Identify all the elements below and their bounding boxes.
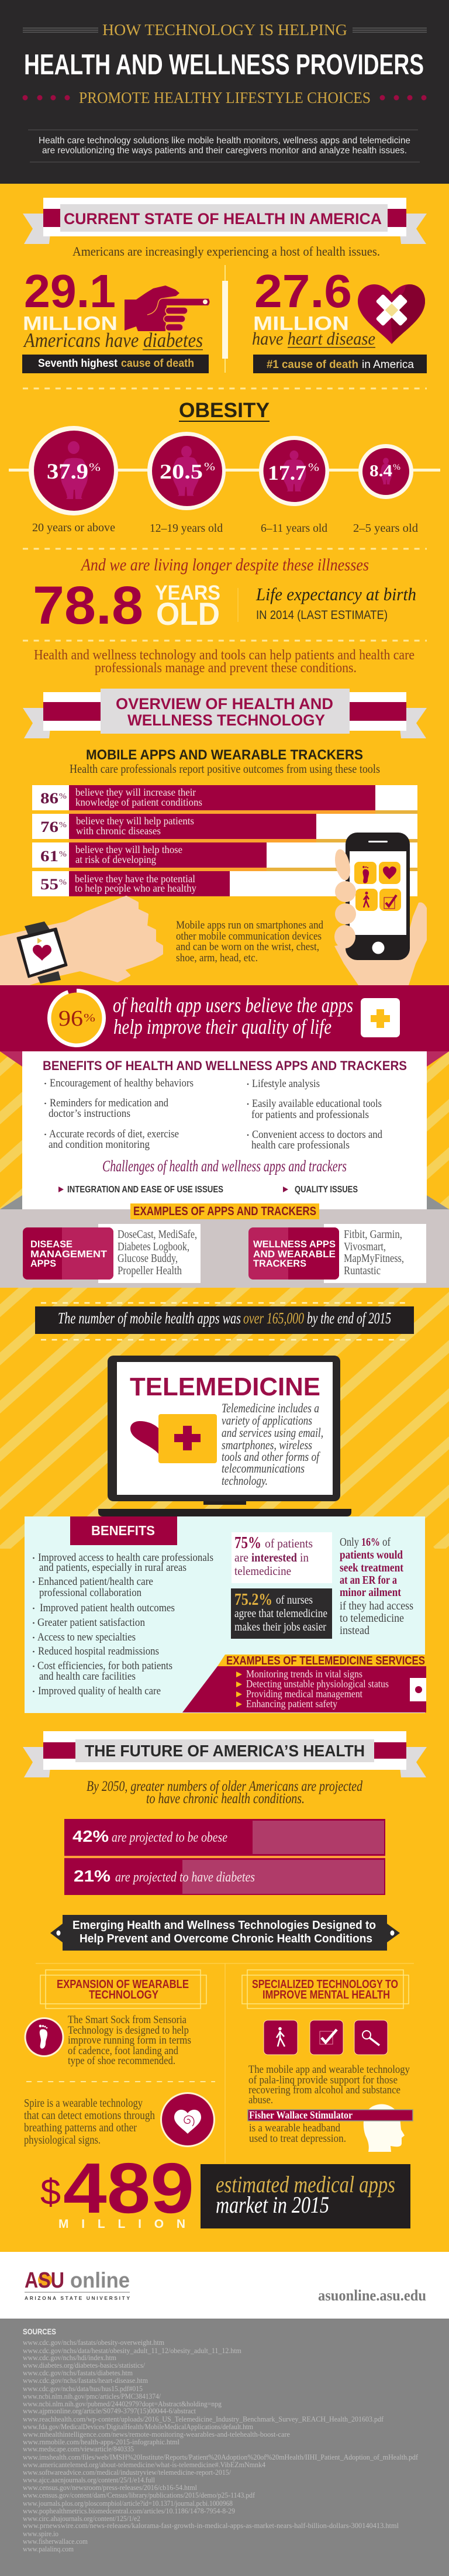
caption bar: in America bbox=[362, 359, 414, 371]
benefits list left bbox=[44, 1077, 194, 1151]
box heading: SPECIALIZED TECHNOLOGY TO bbox=[252, 1978, 398, 1991]
bar: 76%: 76 bbox=[40, 818, 58, 835]
subheading: positive outcomes: Health care professionals report positive outcomes from using these tools bbox=[70, 762, 380, 776]
text: by 2050 bbox=[87, 1779, 362, 1807]
benefits list right: Convenient access to doctors and bbox=[252, 1129, 382, 1141]
source list: www.pophealthmetrics.biomedcentral.com/articles/10.1186/1478-7954-8-29 bbox=[23, 2506, 235, 2515]
stat: heart disease: MILLION bbox=[253, 312, 349, 334]
bar: 21% diabetes: are projected to have diabetes bbox=[115, 1870, 255, 1885]
benefits list: and patients, especially in rural areas bbox=[39, 1562, 186, 1574]
benefits list right: for patients and professionals bbox=[251, 1109, 369, 1121]
text: mobile apps description: Mobile apps run on smartphones and bbox=[176, 919, 323, 931]
text: smart sock bbox=[68, 2014, 191, 2067]
challenge: integration: INTEGRATION AND EASE OF USE ISSUES bbox=[67, 1185, 223, 1195]
ribbon heading: future of health bbox=[23, 1731, 427, 1777]
ribbon heading: overview: WELLNESS TECHNOLOGY bbox=[127, 711, 325, 729]
intro text bbox=[39, 136, 410, 156]
app icon: foot bbox=[362, 866, 369, 883]
stat: only 16%: minor ailment bbox=[340, 1586, 401, 1599]
stat: life expectancy: Life expectancy at birth bbox=[255, 584, 416, 604]
fingers bbox=[333, 848, 356, 948]
phone bbox=[333, 833, 410, 960]
logo: ASU online: online bbox=[70, 2268, 130, 2292]
stat: diabetes: MILLION bbox=[23, 312, 118, 334]
panel: examples of apps and trackers bbox=[0, 1203, 449, 1288]
benefits list left: doctor’s instructions bbox=[49, 1108, 130, 1120]
band: 96% of users: help improve their quality of life bbox=[113, 1015, 331, 1038]
circle: 6-11 years old bbox=[259, 436, 329, 506]
text: pala-linq: of pala-linq provide support for those bbox=[248, 2074, 398, 2086]
caption bar bbox=[253, 355, 427, 373]
bar: 86%: knowledge of patient conditions bbox=[75, 796, 202, 808]
stat: $489 million market: MILLION bbox=[58, 2217, 185, 2231]
benefits tab: BENEFITS bbox=[91, 1523, 155, 1538]
card: wellness apps and trackers: WELLNESS APPS bbox=[253, 1239, 336, 1250]
stat: heart disease: have heart disease bbox=[252, 328, 375, 349]
stat: life expectancy bbox=[33, 576, 416, 635]
label: fisher wallace stimulator: Fisher Wallace Stimulator bbox=[249, 2109, 353, 2121]
donut: 96%: % bbox=[84, 1012, 95, 1024]
bar: 61%: % bbox=[59, 850, 67, 859]
stat: 75.2% of nurses bbox=[231, 1588, 332, 1639]
text: pala-linq: The mobile app and wearable technology bbox=[248, 2063, 410, 2076]
benefits list: and health care facilities bbox=[39, 1670, 136, 1683]
bar: 76% bbox=[40, 815, 194, 837]
bar: 55%: to help people who are healthy bbox=[75, 882, 196, 894]
source list: www.ajpmonline.org/article/S0749-3797(15)00044-6/abstract bbox=[23, 2406, 196, 2415]
stat: diabetes bbox=[22, 265, 209, 373]
bar: 21% diabetes bbox=[64, 1858, 385, 1895]
ribbon heading: current state of health bbox=[23, 198, 427, 244]
source list: www.medscape.com/viewarticle/840335 bbox=[23, 2444, 134, 2453]
card: wellness apps and trackers: TRACKERS bbox=[253, 1258, 306, 1269]
source list: www.prnewswire.com/news-releases/kalorama-fast-growth-in-medical-apps-as-market-nears-half-billion-dollars-300140413.html bbox=[23, 2521, 399, 2530]
benefits list left: Encouragement of healthy behaviors bbox=[50, 1077, 194, 1089]
source list: www.rnmobile.com/health-apps-2015-infographic.html bbox=[23, 2437, 179, 2446]
description: technology. bbox=[222, 1473, 268, 1488]
text: pala-linq: abuse. bbox=[248, 2094, 273, 2106]
obesity chart bbox=[9, 426, 440, 535]
bar chart: outcomes bbox=[32, 785, 417, 896]
panel: examples of telemedicine services: Providing medical management bbox=[246, 1688, 362, 1700]
text: pala-linq: recovering from alcohol and substance bbox=[248, 2084, 400, 2096]
sources panel bbox=[0, 2319, 449, 2576]
text: headband: is a wearable headband bbox=[249, 2122, 340, 2134]
bar: 55%: 55 bbox=[40, 876, 58, 893]
text: smart sock: Technology is designed to help bbox=[68, 2024, 189, 2037]
stat: $489 million market bbox=[40, 2148, 410, 2231]
source list: www.census.gov/content/dam/Census/library/publications/2015/demo/p25-1143.pdf bbox=[23, 2491, 255, 2499]
card: wellness apps and trackers: Vivosmart, bbox=[344, 1240, 386, 1253]
source list: www.softwareadvice.com/medical/industryview/telemedicine-report-2015/ bbox=[23, 2468, 231, 2477]
source list: www.spire.io bbox=[23, 2529, 58, 2538]
card: disease management apps: Propeller Health bbox=[118, 1264, 182, 1277]
icon: foot circle bbox=[25, 2017, 64, 2057]
source list: www.ajcc.aacnjournals.org/content/25/1/e14.full bbox=[23, 2475, 155, 2484]
source list: www.cdc.gov/nchs/data/hus/hus15.pdf#015 bbox=[23, 2384, 143, 2393]
text: by 2050: By 2050, greater numbers of older Americans are projected bbox=[87, 1779, 362, 1794]
card: disease management apps: DISEASE bbox=[30, 1239, 72, 1250]
bar: 76%: believe they will help patients bbox=[76, 815, 194, 827]
circle: 12-19 years old: 20.5 bbox=[160, 460, 203, 483]
benefits list: Cost efficiencies, for both patients bbox=[37, 1660, 172, 1672]
stat: only 16% bbox=[340, 1536, 413, 1637]
stat: life expectancy: IN 2014 (LAST ESTIMATE) bbox=[256, 608, 388, 622]
benefits list: Enhanced patient/health care bbox=[38, 1576, 153, 1588]
logo: ASU online: ARIZONA STATE UNIVERSITY bbox=[25, 2295, 130, 2301]
caption bar: Seventh highest bbox=[38, 357, 118, 370]
bar: 55%: believe they have the potential bbox=[75, 873, 195, 885]
source list: www.cdc.gov/nchs/fastats/diabetes.htm bbox=[23, 2368, 133, 2377]
icon: walker bbox=[264, 2020, 298, 2055]
circle: 6-11 years old: 17.7 bbox=[268, 461, 306, 484]
stat: 75% of patients: of patients bbox=[265, 1536, 313, 1550]
text: spire: that can detect emotions through bbox=[24, 2109, 155, 2122]
stat: 75.2% of nurses: 75.2% bbox=[234, 1591, 272, 1609]
age labels: 6–11 years old bbox=[261, 522, 327, 535]
icon: checkmark bbox=[310, 2020, 343, 2055]
card: wellness apps and trackers bbox=[248, 1224, 426, 1283]
icon: hand holding phone bbox=[333, 833, 427, 985]
bar: 61%: believe they will help those bbox=[75, 844, 182, 855]
heading: TELEMEDICINE bbox=[130, 1373, 320, 1401]
bar: 55%: % bbox=[59, 878, 67, 887]
challenges heading: Challenges of health and wellness apps and trackers bbox=[102, 1157, 347, 1175]
panel: benefits of apps and trackers bbox=[0, 1051, 449, 1209]
intro text: are revolutionizing the ways patients and their caregivers monitor and analyze health issues. bbox=[42, 146, 407, 156]
benefits list right: health care professionals bbox=[251, 1139, 350, 1151]
icon: medical plus card bbox=[361, 998, 400, 1037]
card: disease management apps: APPS bbox=[30, 1258, 56, 1269]
stat: diabetes: 29.1 bbox=[24, 265, 116, 317]
text: spire bbox=[24, 2097, 155, 2147]
stat: 75% of patients: 75% bbox=[234, 1534, 261, 1552]
heading: mobile apps: MOBILE APPS AND WEARABLE TRACKERS bbox=[86, 747, 363, 763]
bar: 76%: with chronic diseases bbox=[76, 825, 161, 837]
app icon: checkmark bbox=[384, 895, 396, 909]
source list: www.diabetes.org/diabetes-basics/statistics/ bbox=[23, 2361, 145, 2369]
source list: www.americantelemed.org/about-telemedicine/what-is-telemedicine#.VibEZmNmnk4 bbox=[23, 2460, 265, 2469]
panel: examples of telemedicine services: Enhancing patient safety bbox=[246, 1698, 337, 1710]
card: disease management apps: DoseCast, MediSafe, bbox=[118, 1228, 197, 1241]
callout box: estimated medical apps bbox=[216, 2171, 395, 2197]
description: telecommunications bbox=[222, 1461, 305, 1476]
banner: emerging technologies: Help Prevent and Overcome Chronic Health Conditions bbox=[80, 1932, 372, 1945]
stat: $489 million market: $ bbox=[40, 2172, 61, 2213]
benefits list left: Accurate records of diet, exercise bbox=[49, 1128, 179, 1140]
text: smart sock: The Smart Sock from Sensoria bbox=[68, 2014, 186, 2026]
card: disease management apps bbox=[23, 1224, 201, 1283]
benefits list: professional collaboration bbox=[39, 1587, 141, 1599]
stat: only 16%: 16% bbox=[361, 1536, 380, 1549]
source list: www.circ.ahajournals.org/content/125/1/e2 bbox=[23, 2514, 140, 2523]
text: pala-linq bbox=[248, 2063, 410, 2106]
source list bbox=[23, 2338, 419, 2553]
subheading: Americans are increasingly experiencing a host of health issues. bbox=[72, 244, 380, 259]
callout box bbox=[201, 2164, 410, 2228]
box heading: IMPROVE MENTAL HEALTH bbox=[263, 1989, 390, 2001]
icon: heart and medical card bbox=[130, 1414, 217, 1463]
circle: 20 years or above: 37.9 bbox=[47, 460, 88, 484]
stat: 75% of patients: in bbox=[300, 1550, 309, 1564]
sources panel: SOURCES bbox=[23, 2327, 56, 2336]
card: disease management apps: Diabetes Logbook, bbox=[118, 1240, 189, 1253]
source list: www.fda.gov/MedicalDevices/DigitalHealth/MobileMedicalApplications/default.htm bbox=[23, 2422, 253, 2431]
stat: heart disease: 27.6 bbox=[254, 265, 352, 317]
text: technology can help bbox=[34, 648, 415, 676]
caption bar: cause of death bbox=[121, 357, 194, 370]
benefits list: Improved quality of health care bbox=[38, 1685, 161, 1697]
age labels: 12–19 years old bbox=[150, 522, 223, 535]
card: wellness apps and trackers: Runtastic bbox=[344, 1264, 381, 1277]
text: mobile apps description: shoe, arm, head, etc. bbox=[176, 952, 258, 964]
callout: number of apps: over 165,000 bbox=[243, 1309, 304, 1327]
stat: only 16%: seek treatment bbox=[340, 1562, 403, 1574]
heading: BENEFITS OF HEALTH AND WELLNESS APPS AND TRACKERS bbox=[43, 1058, 407, 1073]
stat: heart disease bbox=[252, 265, 427, 373]
bar: 61%: 61 bbox=[40, 848, 58, 865]
tab heading: EXAMPLES OF APPS AND TRACKERS bbox=[133, 1205, 316, 1218]
circle: 2-5 years old: % bbox=[393, 463, 400, 472]
source list: www.mhealthintelligence.com/news/remote-monitoring-wearables-and-telehealth-boost-care bbox=[23, 2430, 290, 2439]
benefits list left: Reminders for medication and bbox=[50, 1097, 168, 1109]
benefits list right bbox=[247, 1078, 382, 1151]
benefits list left: and condition monitoring bbox=[49, 1139, 150, 1151]
bar: 86%: believe they will increase their bbox=[75, 786, 196, 798]
bar: 76%: % bbox=[59, 821, 67, 830]
icon: magnifier bbox=[354, 2020, 388, 2055]
heading line 1: HOW TECHNOLOGY IS HELPING bbox=[102, 21, 347, 39]
intro text: Health care technology solutions like mobile health monitors, wellness apps and telemedicine bbox=[39, 136, 410, 146]
circle: 12-19 years old bbox=[147, 432, 226, 510]
ribbon heading: future of health: THE FUTURE OF AMERICA’S HEALTH bbox=[85, 1742, 365, 1760]
stat: 75% of patients: are bbox=[234, 1550, 248, 1564]
card: disease management apps: Glucose Buddy, bbox=[118, 1252, 178, 1265]
ribbon heading: overview: OVERVIEW OF HEALTH AND bbox=[116, 695, 333, 713]
age labels: 2–5 years old bbox=[353, 522, 418, 535]
stat: only 16%: patients would bbox=[340, 1549, 403, 1562]
card: wellness apps and trackers: Fitbit, Garmin, bbox=[344, 1228, 402, 1241]
stat: only 16%: if they had access bbox=[340, 1600, 413, 1612]
source list: www.cdc.gov/nchs/fastats/obesity-overweight.htm bbox=[23, 2338, 164, 2347]
circle: 2-5 years old: 8.4 bbox=[369, 462, 392, 480]
panel: examples of telemedicine services: Detecting unstable physiological status bbox=[246, 1678, 389, 1690]
callout: number of apps bbox=[35, 1306, 414, 1334]
circle: 2-5 years old bbox=[358, 444, 413, 499]
text: smart sock: of cadence, foot landing and bbox=[68, 2045, 178, 2057]
bar: 42% obese: are projected to be obese bbox=[112, 1830, 227, 1845]
source list: www.cdc.gov/nchs/hdi/index.htm bbox=[23, 2353, 116, 2362]
donut: 96% bbox=[47, 989, 106, 1047]
stat: 75% of patients: telemedicine bbox=[234, 1564, 291, 1578]
benefits list: Greater patient satisfaction bbox=[37, 1617, 145, 1629]
banner: emerging technologies: Emerging Health and Wellness Technologies Designed to bbox=[72, 1919, 376, 1932]
donut: 96%: 96 bbox=[58, 1006, 83, 1031]
description: variety of applications bbox=[222, 1413, 312, 1428]
description: tools and other forms of bbox=[222, 1449, 320, 1464]
benefits list: Access to new specialties bbox=[37, 1631, 136, 1643]
benefits list bbox=[33, 1552, 213, 1697]
bar: 61% bbox=[40, 844, 182, 865]
source list: www.ncbi.nlm.nih.gov/pubmed/24402979?dopt=Abstract&holding=npg bbox=[23, 2399, 222, 2408]
source list: www.imshealth.com/files/web/IMSH%20Institute/Reports/Patient%20Adoption%20of%20mHealth/IIHI_Patient_Adoption_of_mHealth.pdf bbox=[23, 2453, 419, 2461]
text: mobile apps description: other mobile communication devices bbox=[176, 930, 322, 943]
source list: www.fisherwallace.com bbox=[23, 2537, 88, 2546]
description bbox=[222, 1401, 323, 1488]
text: technology can help: professionals manage and prevent these conditions. bbox=[95, 661, 357, 676]
source list: www.reachhealth.com/wp-content/uploads/2016_US_Telemedicine_Industry_Benchmark_Survey_REACH_Health_201603.pdf bbox=[23, 2415, 384, 2423]
callout: number of apps: by the end of 2015 bbox=[307, 1309, 391, 1327]
banner: emerging technologies bbox=[50, 1915, 400, 1951]
card: disease management apps: MANAGEMENT bbox=[30, 1249, 108, 1260]
band: 96% of users bbox=[0, 985, 449, 1051]
card: wellness apps and trackers: MapMyFitness, bbox=[344, 1252, 404, 1265]
text: spire: breathing patterns and other bbox=[24, 2121, 137, 2134]
stat: only 16%: at an ER for a bbox=[340, 1574, 397, 1587]
app icon: heart bbox=[383, 866, 396, 879]
stat: life expectancy: OLD bbox=[156, 596, 220, 632]
column: expansion of wearable technology bbox=[24, 1970, 215, 2147]
benefits tab bbox=[70, 1516, 177, 1545]
ribbon heading: current state of health: CURRENT STATE OF HEALTH IN AMERICA bbox=[64, 210, 382, 228]
bar chart: projections bbox=[64, 1819, 385, 1895]
panel: examples of telemedicine services bbox=[182, 1655, 426, 1712]
source list: www.ncbi.nlm.nih.gov/pmc/articles/PMC3841374/ bbox=[23, 2392, 161, 2400]
stat: diabetes: Americans have diabetes bbox=[23, 329, 203, 352]
stat: only 16%: instead bbox=[340, 1624, 369, 1637]
benefits list: Improved access to health care professionals bbox=[38, 1552, 213, 1564]
header panel bbox=[0, 0, 449, 184]
age labels: 20 years or above bbox=[32, 521, 115, 534]
source list: www.cdc.gov/nchs/data/hestat/obesity_adult_11_12/obesity_adult_11_12.htm bbox=[23, 2346, 241, 2355]
callout: number of apps: The number of mobile health apps was bbox=[58, 1309, 241, 1327]
bar: 42% obese bbox=[64, 1819, 385, 1856]
benefits list right: Lifestyle analysis bbox=[252, 1078, 320, 1090]
description: and services using email, bbox=[222, 1425, 323, 1440]
bar: 86%: 86 bbox=[40, 790, 58, 807]
circle: 12-19 years old: % bbox=[204, 460, 215, 473]
bar: 42% obese: 42% bbox=[72, 1827, 109, 1845]
age labels bbox=[32, 521, 418, 535]
icon: wrist with smartwatch bbox=[0, 897, 162, 985]
text: headband: used to treat depression. bbox=[249, 2133, 346, 2145]
benefits list: Improved patient health outcomes bbox=[40, 1602, 175, 1614]
callout box: market in 2015 bbox=[216, 2192, 329, 2218]
url: asuonline.asu.edu bbox=[318, 2287, 426, 2304]
stat: 75.2% of nurses: of nurses bbox=[276, 1594, 313, 1607]
caption bar bbox=[22, 355, 209, 373]
description: Telemedicine includes a bbox=[222, 1401, 319, 1415]
bar: 55% bbox=[40, 873, 196, 894]
band: 96% of users: of health app users believe the apps bbox=[113, 993, 353, 1017]
footer: logo and url bbox=[0, 2252, 449, 2319]
caption bar: #1 cause of death bbox=[267, 359, 358, 371]
text: spire: physiological signs. bbox=[24, 2134, 101, 2147]
bar: 86% bbox=[40, 786, 202, 808]
app icon: walker bbox=[364, 892, 369, 907]
description: smartphones, wireless bbox=[222, 1437, 312, 1452]
benefits list: Reduced hospital readmissions bbox=[38, 1645, 159, 1657]
panel: telemedicine benefits bbox=[25, 1516, 426, 1713]
text: smart sock: type of shoe recommended. bbox=[68, 2055, 175, 2067]
source list: www.cdc.gov/nchs/fastats/heart-disease.htm bbox=[23, 2376, 148, 2385]
heading line 3: PROMOTE HEALTHY LIFESTYLE CHOICES bbox=[79, 89, 371, 106]
challenge: quality: QUALITY ISSUES bbox=[295, 1185, 358, 1195]
icon: finger with blood drop bbox=[125, 286, 209, 331]
obesity heading: OBESITY bbox=[179, 399, 270, 422]
stat: 75.2% of nurses: makes their jobs easier bbox=[234, 1621, 326, 1633]
benefits list right: Easily available educational tools bbox=[252, 1098, 382, 1110]
box heading bbox=[242, 1970, 409, 2008]
stat: life expectancy: 78.8 bbox=[33, 576, 143, 635]
logo: ASU online bbox=[25, 2268, 130, 2301]
box heading: EXPANSION OF WEARABLE bbox=[57, 1978, 189, 1991]
stat: only 16%: to telemedicine bbox=[340, 1612, 404, 1625]
bar: 61%: at risk of developing bbox=[75, 854, 156, 865]
source list: www.journals.plos.org/ploscompbiol/article?id=10.1371/journal.pcbi.1000968 bbox=[23, 2499, 233, 2508]
text: by 2050: to have chronic health conditions. bbox=[146, 1791, 305, 1807]
source list: www.palalinq.com bbox=[23, 2544, 74, 2553]
circle: 20 years or above: % bbox=[89, 461, 101, 474]
box heading: TECHNOLOGY bbox=[89, 1989, 159, 2001]
circle: 6-11 years old: % bbox=[308, 461, 319, 474]
stat: only 16%: of bbox=[382, 1536, 391, 1549]
logo: ASU online: ASU bbox=[25, 2268, 64, 2293]
text: mobile apps description: and can be worn on the wrist, chest, bbox=[176, 941, 319, 953]
column: specialized technology bbox=[242, 1970, 413, 2152]
living longer text: And we are living longer despite these illnesses bbox=[80, 555, 369, 575]
text: spire: Spire is a wearable technology bbox=[24, 2097, 143, 2110]
stat: 75% of patients bbox=[232, 1532, 332, 1583]
stat: 75% of patients: interested bbox=[251, 1550, 297, 1564]
circle: 20 years or above bbox=[29, 426, 118, 515]
laptop: telemedicine bbox=[98, 1356, 351, 1516]
stat: life expectancy: YEARS bbox=[155, 582, 220, 604]
bar: 86%: % bbox=[59, 792, 67, 801]
card: wellness apps and trackers: AND WEARABLE bbox=[253, 1249, 336, 1260]
text: headband bbox=[249, 2122, 346, 2145]
background: diagonal stripes bbox=[0, 1051, 449, 1550]
text: mobile apps description bbox=[176, 919, 323, 964]
bar: 21% diabetes: 21% bbox=[74, 1867, 110, 1885]
text: smart sock: improve running form in terms bbox=[68, 2034, 191, 2047]
icon: heart with bandage bbox=[358, 284, 425, 344]
ribbon heading: overview bbox=[23, 689, 427, 738]
panel: examples of telemedicine services: Monitoring trends in vital signs bbox=[246, 1668, 362, 1680]
icon: syringe divider bbox=[222, 265, 228, 373]
icon: spiral heart circle bbox=[160, 2092, 215, 2147]
box heading bbox=[40, 1970, 206, 2008]
source list: www.census.gov/newsroom/press-releases/2016/cb16-54.html bbox=[23, 2483, 197, 2492]
stat: 75.2% of nurses: agree that telemedicine bbox=[234, 1607, 327, 1620]
stat: only 16%: Only bbox=[340, 1536, 359, 1549]
stat: $489 million market: 489 bbox=[63, 2148, 194, 2228]
icon: head silhouette bbox=[364, 2104, 405, 2152]
text: technology can help: Health and wellness technology and tools can help patients and health care bbox=[34, 648, 415, 663]
